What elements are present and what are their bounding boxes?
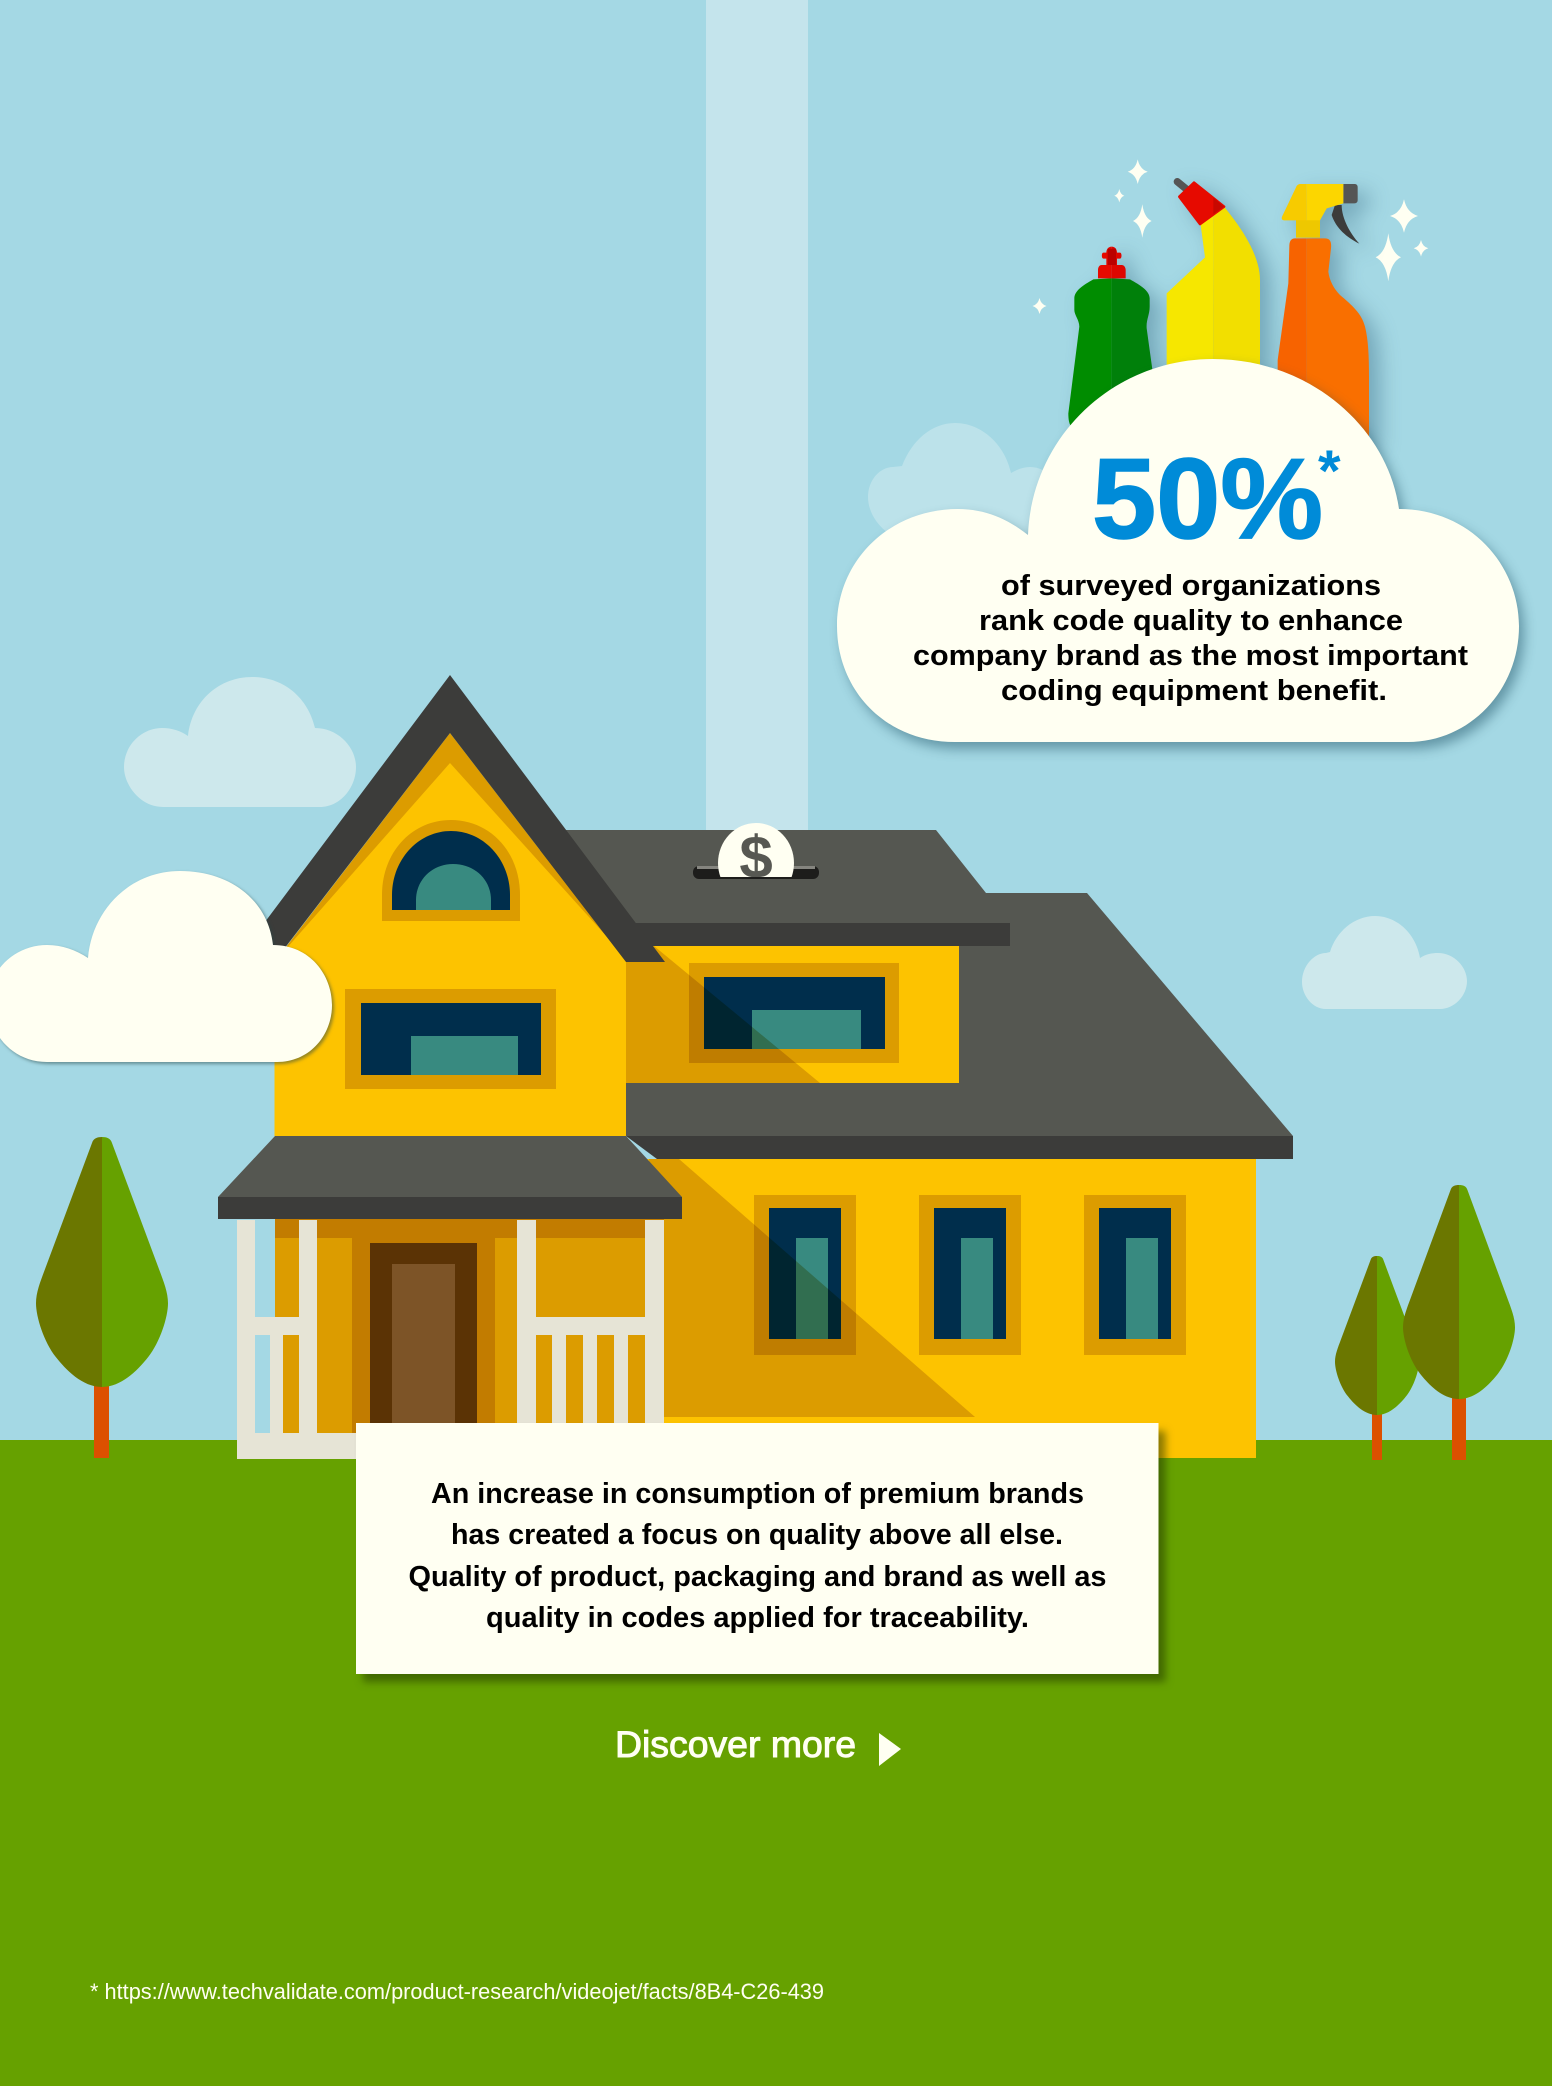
statistic description: company brand as the most important <box>913 640 1468 672</box>
icon: play arrow <box>879 1733 901 1766</box>
card text <box>408 1478 1106 1634</box>
sky gap beside porch wall <box>255 1220 275 1317</box>
statistic: 50%: 50% <box>1092 436 1323 563</box>
background cloud: behind statistic cloud <box>868 423 1070 560</box>
background cloud: right <box>1302 916 1467 1009</box>
sparkles <box>1032 159 1428 314</box>
ground <box>0 1440 1552 2086</box>
cloud shape <box>837 359 1519 742</box>
icon: dollar coin <box>718 823 794 877</box>
gable roof <box>235 675 665 962</box>
coin slot <box>693 866 819 879</box>
background cloud: upper left <box>124 677 356 807</box>
tree: small right <box>1335 1256 1419 1460</box>
sky background <box>0 0 1552 1441</box>
card background <box>356 1423 1158 1674</box>
porch railings and posts <box>237 1220 664 1459</box>
foreground cloud: left <box>0 871 332 1062</box>
porch back wall <box>275 1219 664 1459</box>
dormer wall <box>626 946 959 1083</box>
dormer shadow <box>626 946 820 1083</box>
house illustration <box>218 675 1293 1459</box>
light beam column <box>706 0 808 832</box>
porch cast shadow <box>649 1159 975 1417</box>
upper window <box>345 989 556 1089</box>
card text: An increase in consumption of premium brands <box>431 1478 1084 1510</box>
text card <box>356 1423 1158 1674</box>
porch shade band <box>275 1219 664 1238</box>
roof: rear and main slopes <box>540 830 1293 1136</box>
statistic cloud <box>837 359 1519 742</box>
statistic description: of surveyed organizations <box>1001 570 1381 602</box>
icon: dollar coin: $ <box>739 824 773 891</box>
bottle: green <box>1068 247 1153 427</box>
discover more link: Discover more <box>615 1724 856 1765</box>
porch roof <box>218 1136 682 1219</box>
tree: left <box>36 1137 168 1458</box>
door <box>352 1219 495 1459</box>
statistic description <box>913 570 1468 707</box>
dormer window <box>689 963 899 1063</box>
statistic description: rank code quality to enhance <box>979 605 1403 637</box>
ground floor windows <box>754 1195 1186 1355</box>
lower right wall <box>626 1159 1256 1458</box>
bottle: orange spray <box>1278 184 1369 443</box>
bottles <box>1068 182 1369 443</box>
main roof eave <box>626 1136 1293 1159</box>
tree: large right <box>1403 1185 1515 1460</box>
card text: quality in codes applied for traceability. <box>486 1602 1029 1634</box>
dormer roof eave <box>620 923 1010 946</box>
statistic description: coding equipment benefit. <box>1001 675 1387 707</box>
arched window <box>382 820 520 921</box>
gable wall <box>274 733 626 1136</box>
card text: Quality of product, packaging and brand as well as <box>408 1561 1106 1593</box>
footnote source url: * https://www.techvalidate.com/product-research/videojet/facts/8B4-C26-439 <box>90 1979 824 2004</box>
bottle: yellow <box>1167 182 1260 370</box>
asterisk: * <box>1318 439 1341 504</box>
card text: has created a focus on quality above all else. <box>451 1519 1063 1551</box>
